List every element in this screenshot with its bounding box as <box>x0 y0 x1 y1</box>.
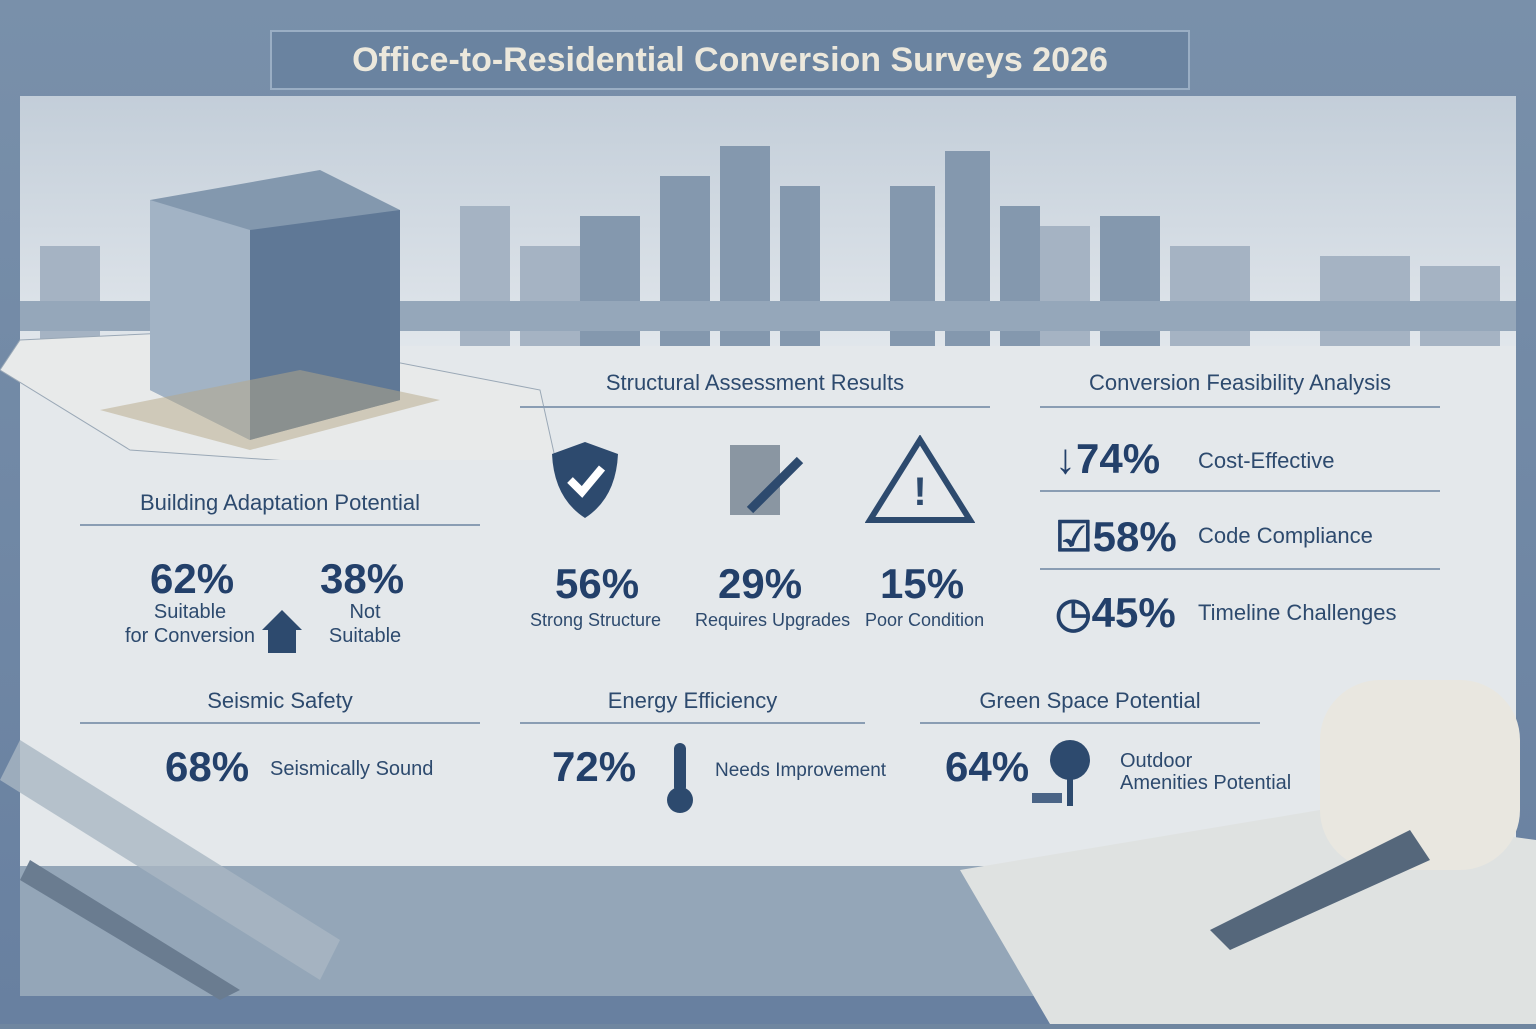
panel: building adaptation: Building Adaptation Potential <box>140 490 420 515</box>
title <box>270 30 1190 90</box>
panel: feasibility <box>1040 370 1440 636</box>
main content panel <box>20 346 1516 866</box>
panel: structural assessment: Requires Upgrades <box>695 610 850 630</box>
panel: seismic: Seismically Sound <box>270 758 433 780</box>
icon: tree <box>1032 740 1090 806</box>
panel: structural assessment: Poor Condition <box>865 610 984 630</box>
panel: building adaptation: Not <box>349 601 381 623</box>
panel: energy: Needs Improvement <box>715 760 886 781</box>
panel: feasibility: ◷45% <box>1055 589 1176 636</box>
icon: warning <box>865 435 975 523</box>
panel: building adaptation: Suitable <box>329 625 401 647</box>
icon: thermometer <box>667 743 693 813</box>
building illustration <box>0 170 554 460</box>
title: Office-to-Residential Conversion Surveys 2026 <box>352 41 1108 79</box>
panel: structural assessment: 56% <box>555 560 639 607</box>
panel: feasibility: Timeline Challenges <box>1198 600 1397 625</box>
panel: feasibility: Conversion Feasibility Analysis <box>1089 370 1391 395</box>
ruler tools <box>0 740 340 1000</box>
icon: warning: ! <box>913 470 927 514</box>
panel: green space <box>920 688 1291 806</box>
panel: building adaptation: 38% <box>320 555 404 602</box>
panel: feasibility: ↓74% <box>1055 435 1160 482</box>
panel: structural assessment: Strong Structure <box>530 610 661 630</box>
panel: green space: Green Space Potential <box>979 688 1201 713</box>
panel: seismic: Seismic Safety <box>207 688 353 713</box>
panel: structural assessment: 29% <box>718 560 802 607</box>
panel: feasibility: Code Compliance <box>1198 523 1373 548</box>
panel: feasibility: ☑58% <box>1055 513 1177 560</box>
panel: structural assessment: 15% <box>880 560 964 607</box>
blueprint rolls <box>960 680 1536 1024</box>
panel: building adaptation: for Conversion <box>125 625 255 647</box>
panel: building adaptation <box>80 490 480 653</box>
panel: structural assessment <box>520 370 990 630</box>
panel: structural assessment: Structural Assessment Results <box>606 370 904 395</box>
skyline panel <box>20 96 1516 356</box>
panel: energy: 72% <box>552 743 636 790</box>
icon: shield <box>552 442 618 518</box>
panel: green space: 64% <box>945 743 1029 790</box>
panel: building adaptation: 62% <box>150 555 234 602</box>
icon: column wrench <box>730 445 804 515</box>
panel: feasibility: Cost-Effective <box>1198 448 1335 473</box>
panel: building adaptation: Suitable <box>154 601 226 623</box>
panel: green space: Amenities Potential <box>1120 772 1291 794</box>
panel: seismic <box>80 688 480 790</box>
blueprint bottom <box>20 866 1516 996</box>
panel: energy: Energy Efficiency <box>608 688 777 713</box>
panel: seismic: 68% <box>165 743 249 790</box>
panel: energy <box>520 688 886 813</box>
icon: house <box>262 610 302 653</box>
panel: green space: Outdoor <box>1120 750 1192 772</box>
